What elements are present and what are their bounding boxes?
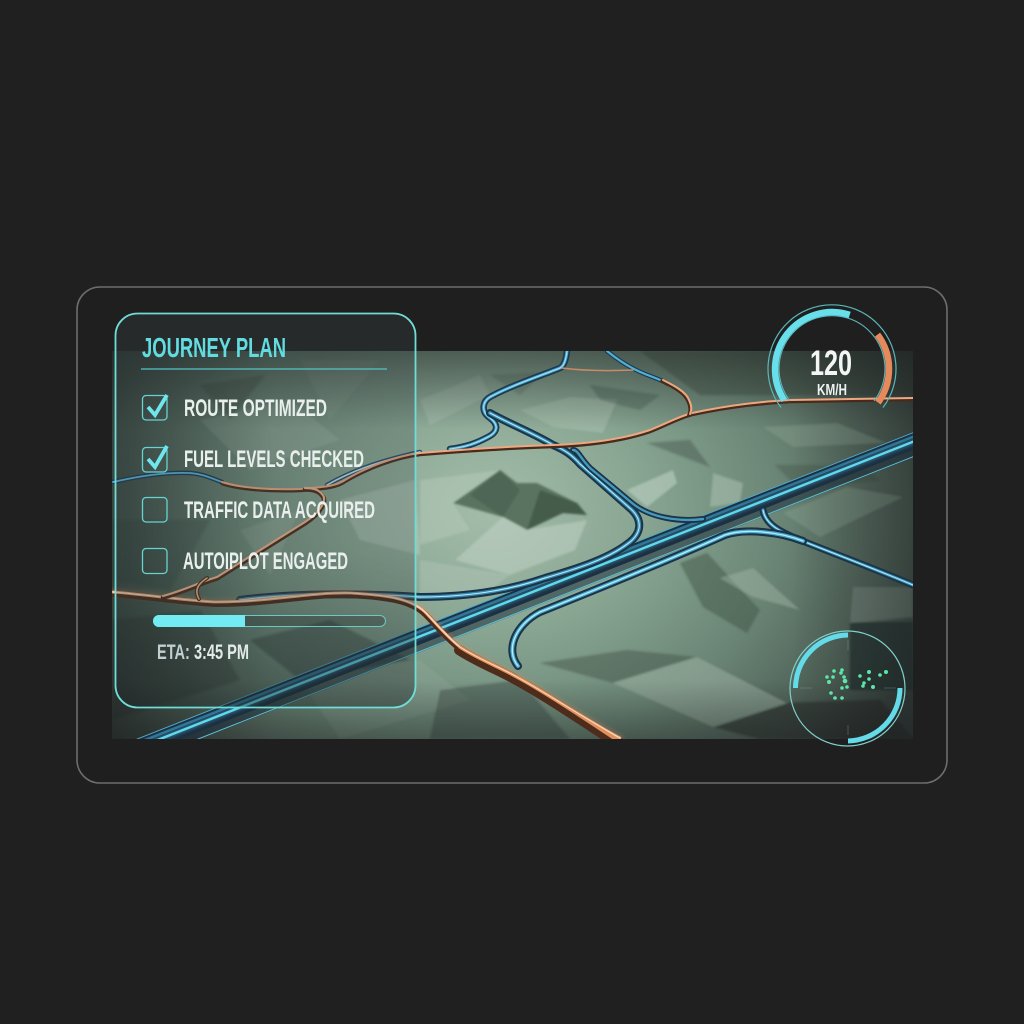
unit: KM/H (817, 382, 847, 399)
map (112, 351, 925, 773)
checklist item: autopilot (142, 548, 348, 575)
speed gauge (768, 305, 896, 408)
terrain (112, 351, 913, 739)
progress bar (153, 615, 386, 627)
checklist item: traffic data (142, 497, 375, 524)
eta: ETA: 3:45 PM (157, 641, 249, 664)
blue roads (113, 351, 913, 666)
orange roads (113, 368, 913, 745)
checklist item: traffic data: TRAFFIC DATA ACQUIRED (184, 497, 375, 524)
checklist item: fuel levels (142, 446, 364, 473)
radar (790, 631, 905, 746)
checklist item: route optimized: ROUTE OPTIMIZED (184, 395, 327, 422)
dashboard frame (77, 287, 947, 783)
redline arc (878, 335, 889, 403)
checklist item: fuel levels: FUEL LEVELS CHECKED (184, 446, 364, 473)
radar dots (825, 668, 888, 700)
highway (136, 432, 913, 739)
panel: journey plan (116, 314, 416, 708)
checklist item: route optimized (142, 395, 327, 422)
speed value: 120 (810, 344, 852, 383)
checklist item: autopilot: AUTOIPLOT ENGAGED (183, 548, 348, 575)
speed arc (775, 312, 850, 400)
heading: JOURNEY PLAN (142, 332, 286, 363)
